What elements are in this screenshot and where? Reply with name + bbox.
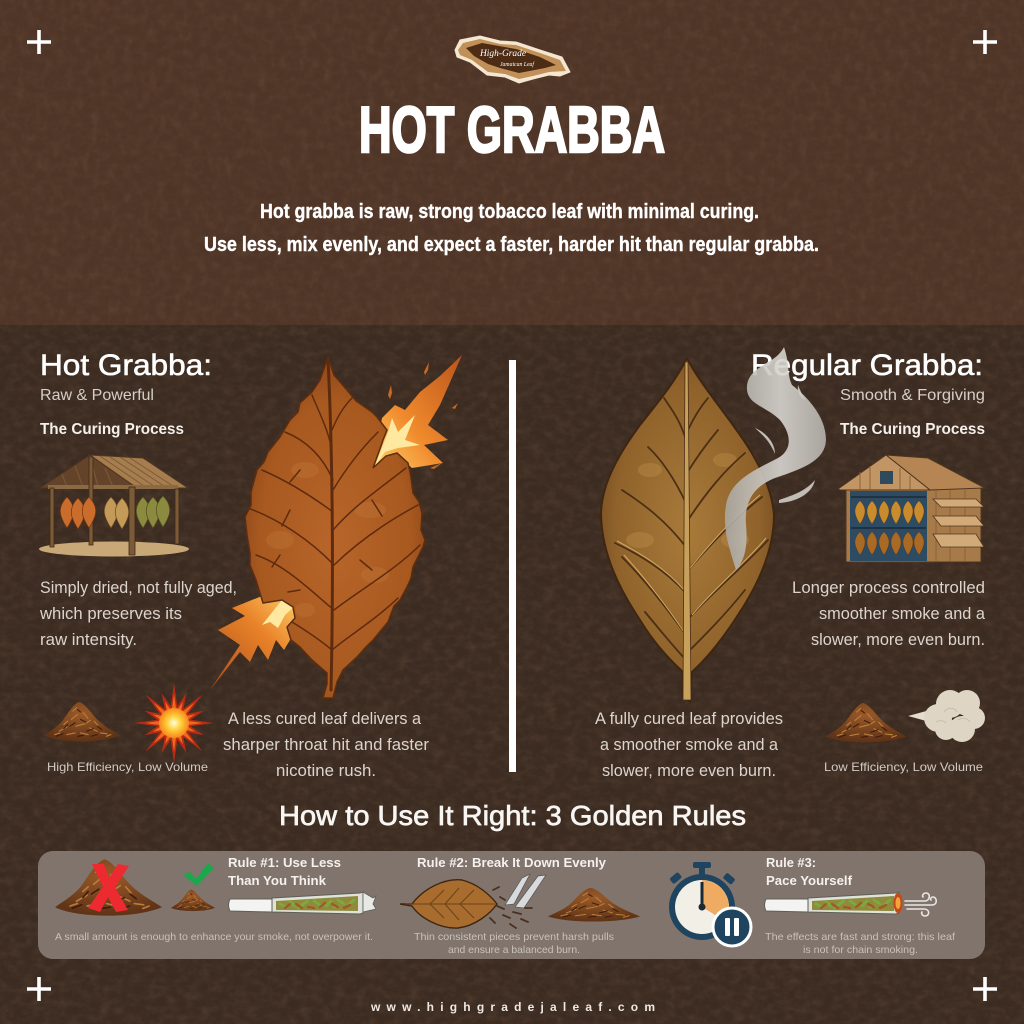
- footer website: www.highgradejaleaf.com: [370, 1000, 655, 1014]
- text: less cured leaf: A less cured leaf delivers a: [228, 710, 422, 728]
- section heading: golden rules: How to Use It Right: 3 Golden Rules: [279, 800, 746, 831]
- text: curing description: [39, 579, 237, 649]
- caption: high efficiency: High Efficiency, Low Volume: [47, 760, 208, 774]
- logo: Jamaica island badge: High-Grade: [479, 48, 526, 58]
- text: less cured leaf: nicotine rush.: [276, 762, 376, 780]
- caption: low efficiency: Low Efficiency, Low Volume: [824, 760, 983, 774]
- icon: joint: [228, 892, 376, 914]
- rule 3 description: The effects are fast and strong: this leaf: [765, 931, 955, 943]
- icon: curing barn: [838, 455, 985, 562]
- curing process label: The Curing Process: [40, 421, 184, 438]
- curing process label: The Curing Process: [840, 421, 985, 438]
- icon: smoke puff: [908, 690, 985, 742]
- rule 2 description: and ensure a balanced burn.: [448, 944, 580, 956]
- panel: rules: [38, 851, 985, 959]
- text: fully cured leaf: A fully cured leaf provides: [595, 710, 783, 728]
- text: curing description: [792, 579, 986, 649]
- logo: Jamaica island badge: [455, 36, 570, 83]
- icon: pile of grabba: [826, 703, 906, 742]
- text: fully cured leaf: [595, 710, 783, 780]
- panel: hot grabba: [39, 349, 462, 780]
- hot grabba subtitle: Raw & Powerful: [40, 387, 154, 404]
- smoke wisp: [725, 347, 826, 570]
- rule 2 description: [414, 931, 614, 956]
- illustration: hot leaf with fire bursts: [210, 355, 462, 698]
- leaf veins: [615, 398, 768, 660]
- text: less cured leaf: sharper throat hit and faster: [223, 736, 430, 754]
- title: HOT GRABBA: [359, 93, 665, 166]
- icon: large pile crossed out: [55, 859, 162, 916]
- logo: Jamaica island badge: Jamaican Leaf: [500, 61, 535, 68]
- text: curing description: smoother smoke and a: [819, 605, 986, 623]
- regular grabba subtitle: Smooth & Forgiving: [840, 387, 985, 404]
- intro text: Hot grabba is raw, strong tobacco leaf with minimal curing.: [260, 201, 759, 223]
- regular grabba heading: Regular Grabba:: [751, 349, 983, 382]
- rule 3 description: is not for chain smoking.: [803, 944, 918, 956]
- center divider: [509, 360, 516, 772]
- intro text: [204, 201, 819, 256]
- rule 1 title: [228, 855, 341, 888]
- icon: stopwatch with pause: [669, 862, 751, 946]
- text: curing description: slower, more even burn.: [811, 631, 985, 649]
- text: curing description: Longer process controlled: [792, 579, 985, 597]
- leaf body: [245, 357, 425, 698]
- rule 3: pace yourself: [669, 855, 955, 956]
- intro text: Use less, mix evenly, and expect a faster, harder hit than regular grabba.: [204, 234, 819, 256]
- text: curing description: Simply dried, not fully aged,: [40, 579, 237, 597]
- rule 1: use less: [55, 855, 376, 943]
- rule 1 title: Than You Think: [228, 873, 327, 888]
- icon: green check: [183, 863, 214, 886]
- icon: small pile: [171, 889, 215, 911]
- rule 2: break it down: [400, 855, 640, 956]
- rule 2 title: Rule #2: Break It Down Evenly: [417, 855, 607, 870]
- text: less cured leaf: [223, 710, 430, 780]
- rule 3 description: [765, 931, 955, 956]
- icon: open curing shed: [39, 455, 189, 556]
- rule 3 title: [766, 855, 853, 888]
- leaf shading: [266, 462, 389, 617]
- hot grabba heading: Hot Grabba:: [40, 349, 212, 382]
- background: lower band: [0, 325, 1024, 1024]
- icon: lit joint: [764, 892, 902, 914]
- icon: explosion: [134, 683, 214, 763]
- leaf veins: [248, 360, 420, 690]
- rule 1 description: A small amount is enough to enhance your smoke, not overpower it.: [55, 931, 373, 943]
- text: fully cured leaf: a smoother smoke and a: [600, 736, 779, 754]
- icon: wind: [905, 893, 936, 916]
- rule 3 title: Pace Yourself: [766, 873, 853, 888]
- illustration: regular leaf: [601, 358, 774, 702]
- icon: shreds: [490, 887, 532, 928]
- text: curing description: which preserves its: [39, 605, 182, 623]
- icon: finished shred pile: [548, 888, 640, 922]
- leaf shading: [626, 453, 749, 548]
- panel: regular grabba: [595, 347, 986, 780]
- rule 1 title: Rule #1: Use Less: [228, 855, 341, 870]
- text: fully cured leaf: slower, more even burn.: [602, 762, 776, 780]
- icon: sideways leaf: [400, 880, 497, 928]
- icon: small pile of grabba: [44, 702, 120, 741]
- rule 3 title: Rule #3:: [766, 855, 816, 870]
- text: curing description: raw intensity.: [40, 631, 137, 649]
- rule 2 description: Thin consistent pieces prevent harsh pulls: [414, 931, 614, 943]
- background: upper band: [0, 0, 1024, 325]
- fire burst upper right: [373, 355, 462, 469]
- icon: cutter blades: [505, 874, 546, 908]
- fire burst lower left: [210, 596, 300, 690]
